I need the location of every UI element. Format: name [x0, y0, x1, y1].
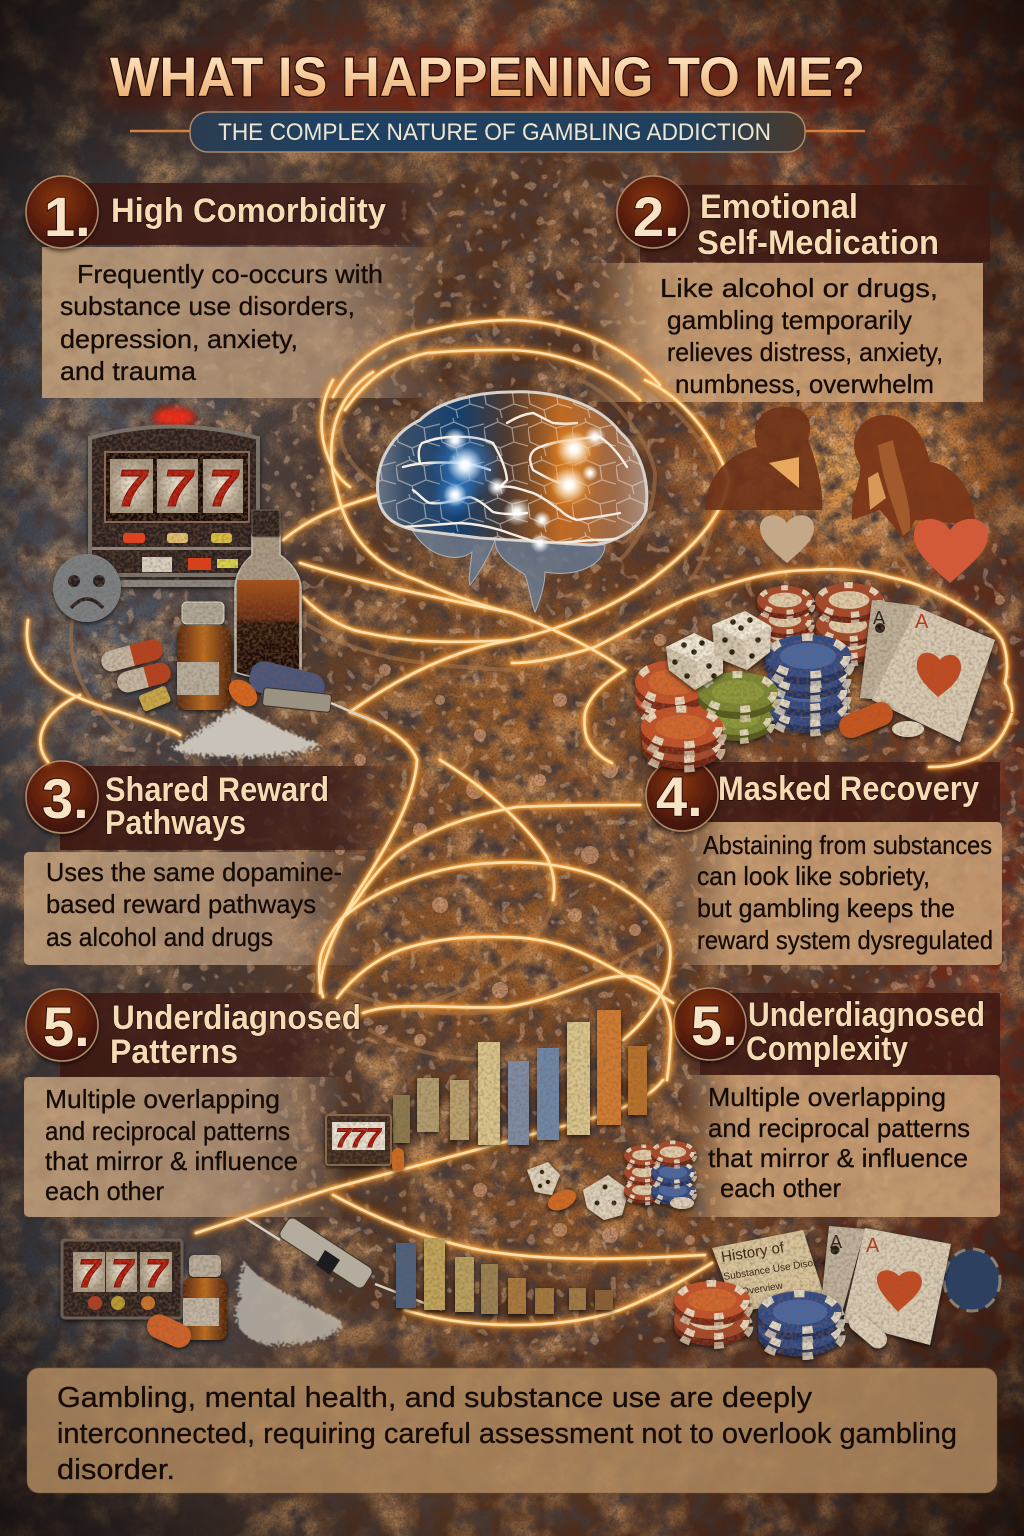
panel: 1 high comorbidity: and trauma — [60, 356, 197, 386]
panel: 2 emotional self-medication: relieves distress, anxiety, — [667, 337, 943, 367]
panel: 5 underdiagnosed patterns: and reciprocal patterns — [45, 1116, 290, 1146]
icon: playing cards: A — [915, 611, 929, 633]
panel: summary: interconnected, requiring careful assessment not to overlook gambling — [57, 1418, 957, 1450]
title: WHAT IS HAPPENING TO ME? — [110, 45, 865, 108]
icon: bottom slot machine — [62, 1240, 182, 1318]
panel: 5 underdiagnosed patterns: that mirror & influence — [45, 1146, 298, 1176]
panel: summary — [27, 1368, 997, 1493]
panel: 4 masked recovery — [646, 759, 1002, 965]
panel: 4 masked recovery: reward system dysregulated — [697, 925, 993, 955]
icon: history note — [712, 1230, 832, 1312]
icon: playing cards — [860, 600, 995, 742]
icon: syringe small — [262, 687, 375, 722]
icon: small chip stacks — [624, 1141, 695, 1209]
subtitle banner: THE COMPLEX NATURE OF GAMBLING ADDICTION — [218, 119, 771, 146]
panel: 3 shared reward pathways: based reward pathways — [46, 889, 316, 919]
reels 777: 7 — [164, 460, 195, 518]
icon: poker chip stacks right — [635, 583, 883, 769]
panel: 2 emotional self-medication: numbness, overwhelm — [675, 369, 934, 399]
reels 777: 7 — [209, 460, 240, 518]
icon: bottom slot machine: 7 — [78, 1252, 102, 1296]
panel: 2 emotional self-medication: Self-Medication — [697, 224, 939, 262]
icon: bottom playing cards: A — [830, 1232, 842, 1252]
panel: 3 shared reward pathways: Shared Reward — [105, 771, 329, 809]
panel: 4 masked recovery: Masked Recovery — [718, 770, 979, 808]
panel: 5 underdiagnosed patterns — [24, 989, 361, 1217]
reels 777 — [110, 459, 243, 518]
golden swirl lines — [27, 320, 1012, 1325]
silhouette: person one — [705, 407, 822, 510]
icon: history note: Overview — [741, 1280, 784, 1298]
icon: red heart — [914, 519, 988, 583]
number badge 2 — [617, 176, 689, 248]
panel: summary: Gambling, mental health, and substance use are deeply — [57, 1382, 813, 1414]
icon: slot machine — [90, 408, 258, 587]
icon: dark blue chip — [944, 1249, 1000, 1311]
number badge 4: 4. — [656, 765, 703, 828]
icon: small slot machine: 7 — [350, 1123, 367, 1153]
icon: sad face — [53, 554, 121, 622]
icon: small slot machine — [326, 1115, 404, 1172]
icon: bottom pill bottle — [143, 1255, 227, 1352]
icon: bottom playing cards: A — [866, 1235, 880, 1257]
bar chart: bottom — [396, 1238, 613, 1314]
panel: 3 shared reward pathways: as alcohol and drugs — [46, 922, 273, 952]
icon: bottom playing cards — [820, 1226, 951, 1345]
panel: 1 high comorbidity: High Comorbidity — [111, 192, 386, 230]
panel: 5 underdiagnosed patterns: Patterns — [110, 1033, 238, 1071]
icon: small dice — [527, 1162, 629, 1220]
panel: 2 emotional self-medication — [585, 176, 990, 402]
number badge 3: 3. — [42, 767, 89, 830]
silhouette: person two — [852, 415, 975, 540]
icon: distressed silhouettes — [705, 407, 975, 540]
icon: history note: Substance Use Disorder — [723, 1255, 832, 1283]
panel: 3 shared reward pathways: Uses the same dopamine- — [46, 857, 342, 887]
icon: history note: History of — [720, 1239, 786, 1266]
panel: 5 underdiagnosed patterns: Underdiagnosed — [112, 999, 361, 1037]
icon: pale heart — [760, 515, 814, 563]
panel: 4 masked recovery: but gambling keeps the — [697, 893, 955, 923]
panel: 1 high comorbidity: depression, anxiety, — [60, 324, 298, 354]
panel: 1 high comorbidity: substance use disorders, — [60, 291, 355, 321]
panel: 5 underdiagnosed patterns: Multiple overlapping — [45, 1084, 280, 1114]
panel: 5 underdiagnosed complexity: each other — [720, 1173, 841, 1203]
icon: playing cards: A — [873, 608, 885, 628]
number badge 5 right — [674, 988, 746, 1060]
reels 777: 7 — [118, 460, 149, 518]
panel: 5 underdiagnosed complexity: Complexity — [746, 1030, 908, 1068]
number badge 5 right: 5. — [691, 994, 738, 1057]
icon: large syringe — [245, 1216, 442, 1310]
icon: liquor bottle — [235, 510, 301, 678]
icon: dice — [666, 611, 771, 690]
icon: pills and capsules — [99, 637, 328, 712]
number badge 2: 2. — [633, 185, 680, 248]
panel: 1 high comorbidity: Frequently co-occurs with — [77, 259, 383, 289]
icon: brain — [370, 385, 655, 612]
icon: powder pile — [170, 708, 322, 757]
icon: bottom slot machine: 7 — [145, 1252, 169, 1296]
panel: 5 underdiagnosed complexity: that mirror & influence — [708, 1143, 968, 1173]
number badge 5 left — [26, 989, 98, 1061]
subtitle banner — [130, 112, 865, 152]
panel: summary: disorder. — [57, 1454, 175, 1486]
panel: 1 high comorbidity — [26, 176, 442, 398]
icon: bottom poker chips — [674, 1281, 891, 1356]
icon: bottom slot machine: 7 — [111, 1252, 135, 1296]
icon: small slot machine: 7 — [365, 1123, 382, 1153]
panel: 2 emotional self-medication: Emotional — [700, 188, 858, 226]
panel: 5 underdiagnosed patterns: each other — [45, 1176, 164, 1206]
icon: capsule and tablet right — [836, 698, 924, 742]
panel: 5 underdiagnosed complexity: Underdiagnosed — [748, 996, 985, 1034]
panel: 3 shared reward pathways — [24, 761, 395, 965]
number badge 4 — [646, 759, 718, 831]
number badge 1 — [26, 176, 98, 248]
panel: 4 masked recovery: can look like sobriety, — [697, 861, 930, 891]
number badge 5 left: 5. — [43, 995, 90, 1058]
panel: 5 underdiagnosed complexity: and reciprocal patterns — [708, 1113, 970, 1143]
bar chart: middle — [393, 1010, 647, 1145]
panel: 3 shared reward pathways: Pathways — [105, 804, 246, 842]
number badge 3 — [26, 761, 98, 833]
icon: bottom powder — [235, 1262, 342, 1345]
panel: 5 underdiagnosed complexity: Multiple overlapping — [708, 1082, 946, 1112]
panel: 2 emotional self-medication: Like alcohol or drugs, — [660, 273, 938, 303]
panel: 4 masked recovery: Abstaining from substances — [703, 830, 992, 860]
number badge 1: 1. — [44, 185, 91, 248]
icon: small slot machine: 7 — [335, 1123, 352, 1153]
icon: pill bottle — [177, 602, 231, 710]
panel: 2 emotional self-medication: gambling temporarily — [667, 305, 912, 335]
panel: 5 underdiagnosed complexity — [674, 988, 1000, 1217]
